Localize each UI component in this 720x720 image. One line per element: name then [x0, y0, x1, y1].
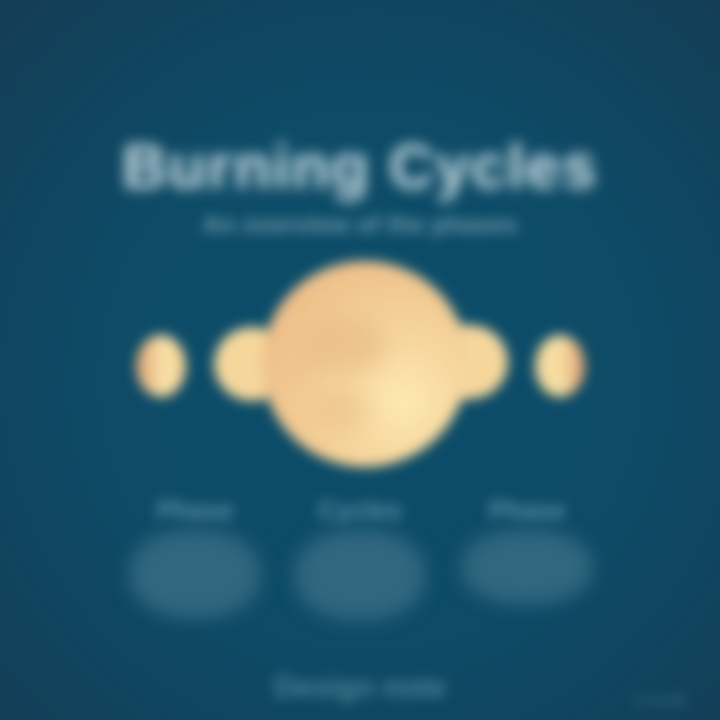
near left moon [214, 327, 290, 401]
centre heading: Cycles [318, 495, 402, 525]
left text [130, 530, 260, 618]
right heading: Phase [489, 495, 565, 525]
column: centre [289, 495, 430, 626]
column: right [457, 495, 597, 610]
subtitle: An overview of the phases [202, 211, 518, 239]
centre text [295, 530, 425, 620]
corner mark: credit [633, 687, 687, 712]
near right moon [432, 325, 508, 399]
far right moon [535, 335, 585, 397]
right text [462, 530, 592, 604]
column: left [124, 495, 266, 624]
central full moon [262, 261, 468, 467]
left heading: Phase [157, 495, 233, 525]
far left moon [136, 335, 186, 397]
footer: Design note [274, 671, 446, 704]
title: Burning Cycles [122, 133, 598, 202]
